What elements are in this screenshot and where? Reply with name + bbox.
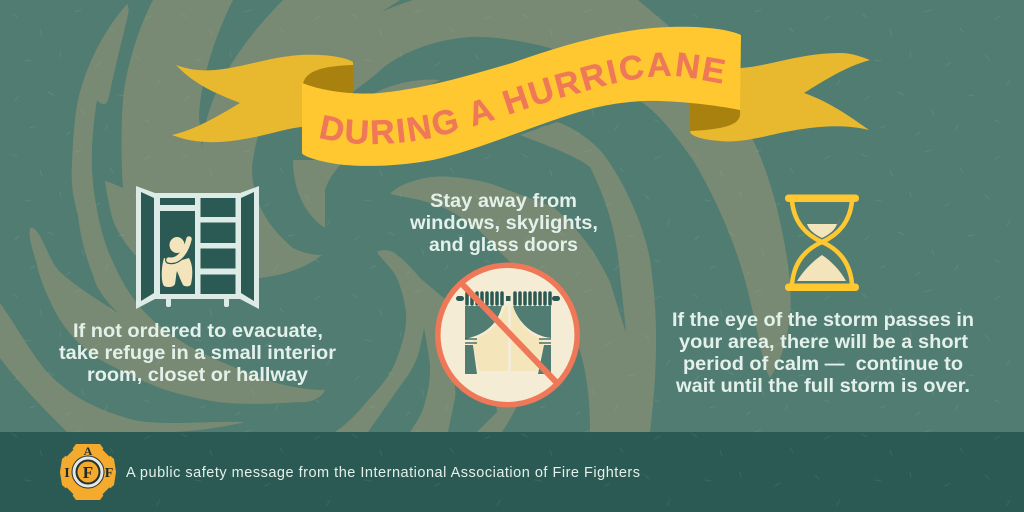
- hurricane swirl background: [0, 0, 791, 432]
- IAFF logo: I: [64, 466, 70, 481]
- icon: no windows sign: [438, 265, 577, 405]
- IAFF logo: F: [105, 466, 113, 481]
- IAFF logo: A: [84, 444, 93, 458]
- swirl: lower-centre blade: [335, 250, 470, 432]
- footer band: [0, 432, 1024, 512]
- text: take refuge: [59, 320, 336, 386]
- text: stay away from windows: [409, 190, 598, 256]
- icon: hourglass: [785, 194, 859, 291]
- text: stay away from windows: and glass doors: [429, 234, 578, 256]
- sand: [807, 224, 837, 238]
- text: eye of the storm: wait until the full storm is over.: [675, 375, 970, 397]
- text: eye of the storm: period of calm — continue to: [683, 353, 963, 375]
- banner left fold: [303, 65, 353, 93]
- swirl: blade under banner left: [293, 160, 345, 228]
- swirl: small strip under sign: [477, 395, 520, 432]
- banner main ribbon: [302, 27, 741, 166]
- text: take refuge: If not ordered to evacuate,: [73, 320, 323, 342]
- text: take refuge: room, closet or hallway: [87, 364, 308, 386]
- text: eye of the storm: [672, 309, 974, 397]
- window panes: [465, 306, 502, 339]
- banner right fold: [690, 102, 740, 131]
- swirl: central arc: [390, 122, 656, 432]
- swirl: bottom-left strip: [0, 303, 245, 432]
- curtain rod and pleats: [456, 296, 560, 301]
- IAFF logo: F: [83, 463, 93, 482]
- banner right tail: [690, 53, 870, 142]
- swirl: sliver above banner: [375, 80, 440, 105]
- swirl: upper-left mass: [105, 0, 400, 278]
- title banner: [172, 26, 870, 166]
- text: eye of the storm: your area, there will be a short: [679, 331, 969, 353]
- banner left tail: [172, 55, 353, 142]
- text: stay away from windows: Stay away from: [430, 190, 577, 212]
- footer text: A public safety message from the International Association of Fire Fighters: [126, 465, 640, 481]
- text: take refuge: take refuge in a small interior: [59, 342, 336, 364]
- banner title text: DURING A HURRICANE: [320, 52, 726, 144]
- curtains: [473, 306, 508, 371]
- swirl: top arc into right arm: [313, 0, 791, 378]
- IAFF logo: [60, 444, 116, 500]
- text: eye of the storm: If the eye of the storm passes in: [672, 309, 974, 331]
- prohibition slash: [462, 284, 557, 383]
- text: stay away from windows: windows, skylights,: [409, 212, 598, 234]
- icon: wardrobe with person sheltering: [136, 186, 259, 309]
- swirl: far-left arm: [30, 4, 325, 404]
- person sitting: [162, 237, 192, 287]
